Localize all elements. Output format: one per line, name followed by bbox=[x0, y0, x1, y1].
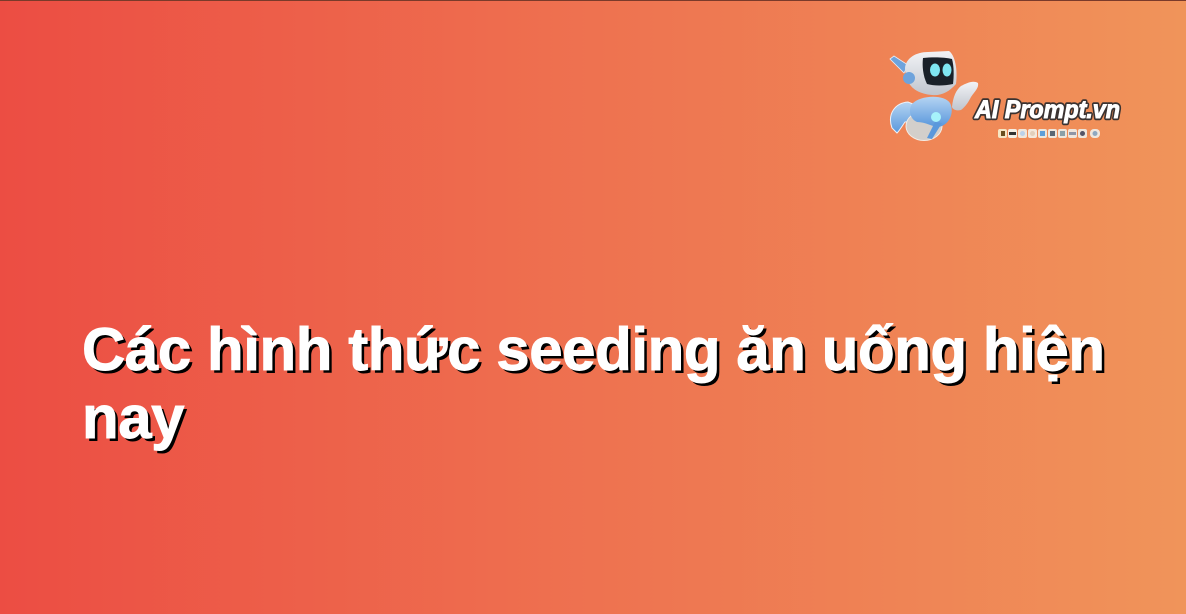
logo wordmark: AI Prompt.vn bbox=[974, 96, 1120, 124]
icon: robot bbox=[890, 51, 978, 140]
title: Các hình thức seeding ăn uống hiện nay bbox=[82, 316, 1105, 451]
logo: AI Prompt.vn robot bbox=[890, 51, 1122, 141]
logo icon strip bbox=[998, 129, 1100, 138]
logo wordmark: AI Prompt.vn bbox=[974, 96, 1120, 124]
